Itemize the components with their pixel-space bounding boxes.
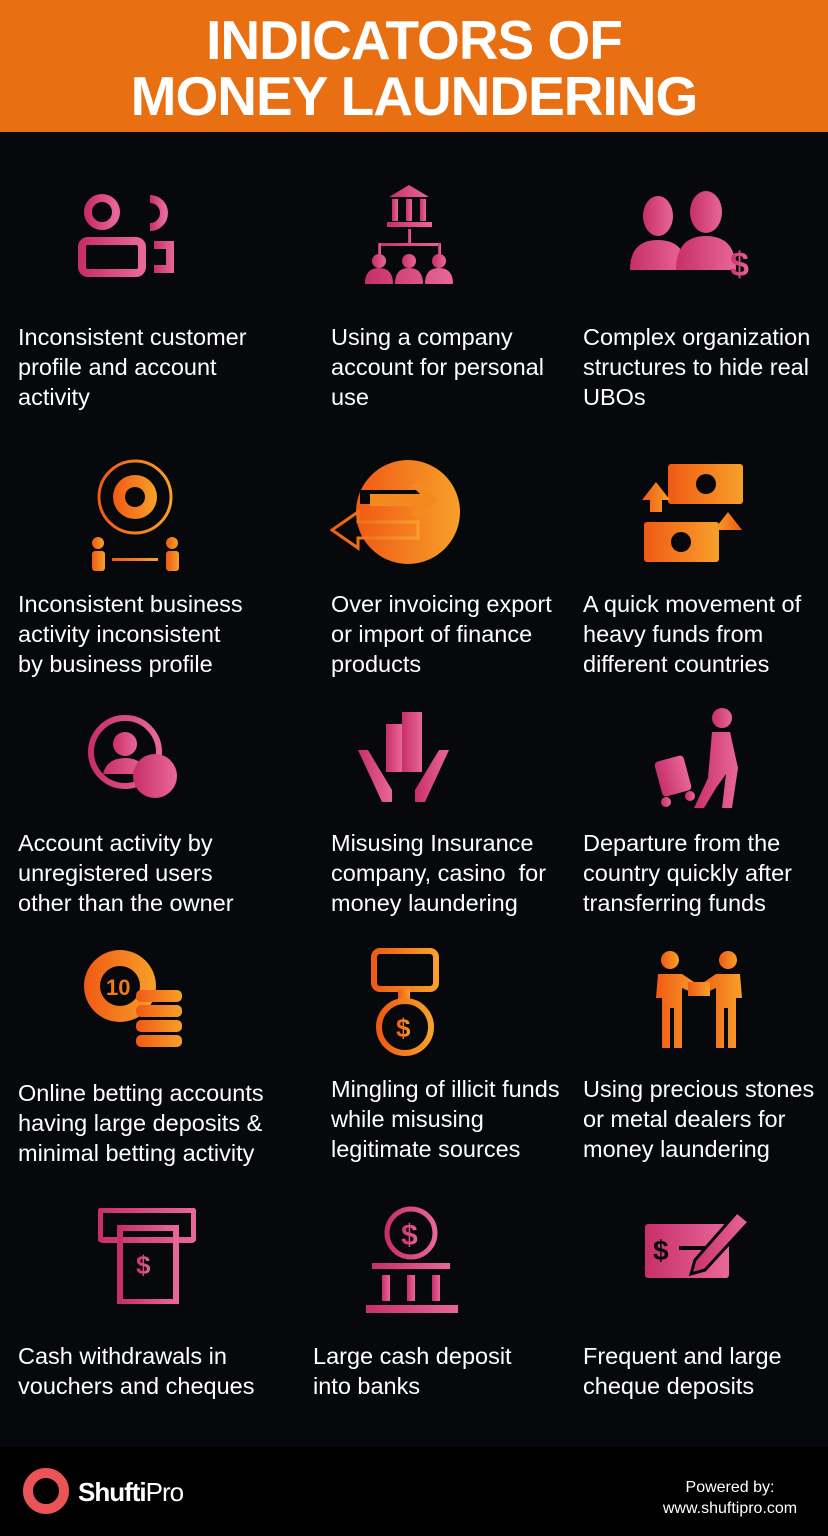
text: Over invoicing export <box>331 591 552 617</box>
icon: hands building <box>358 712 449 802</box>
text: Inconsistent customer <box>18 324 247 350</box>
text: by business profile <box>18 651 213 677</box>
icon: businessmen dollar: $ <box>730 246 749 283</box>
text: Inconsistent business <box>18 591 243 617</box>
text: structures to hide real <box>583 354 809 380</box>
powered by <box>662 1479 797 1517</box>
text: Frequent and large <box>583 1343 782 1369</box>
icon: hand money bag <box>371 948 439 1056</box>
icon: users <box>78 194 174 277</box>
logo <box>23 1468 183 1514</box>
text: profile and account <box>18 354 217 380</box>
text: country quickly after <box>583 860 792 886</box>
text: cheque deposits <box>583 1373 754 1399</box>
icon: businessmen dollar <box>630 191 749 283</box>
icon: cheque pen: $ <box>653 1235 669 1266</box>
text: other than the owner <box>18 890 234 916</box>
text: transferring funds <box>583 890 766 916</box>
icon: globe arrow <box>330 460 460 564</box>
text: Large cash deposit <box>313 1343 512 1369</box>
text: unregistered users <box>18 860 213 886</box>
text: having large deposits & <box>18 1110 262 1136</box>
text: Account activity by <box>18 830 213 856</box>
icon: cheque pen <box>645 1214 747 1278</box>
icon: bank coin <box>366 1206 458 1313</box>
text: Complex organization <box>583 324 810 350</box>
icon: hand money bag: $ <box>396 1013 411 1043</box>
text: UBOs <box>583 384 646 410</box>
text: activity <box>18 384 90 410</box>
text: Using a company <box>331 324 513 350</box>
text: different countries <box>583 651 769 677</box>
text: use <box>331 384 369 410</box>
text: money laundering <box>331 890 518 916</box>
text: or import of finance <box>331 621 532 647</box>
icon: user circle <box>88 715 177 798</box>
text: Mingling of illicit funds <box>331 1076 560 1102</box>
text: money laundering <box>583 1136 770 1162</box>
icon: bank hierarchy <box>365 185 453 284</box>
powered by: Powered by: <box>686 1479 774 1496</box>
text: Misusing Insurance <box>331 830 533 856</box>
icon: cash withdrawal <box>98 1208 196 1304</box>
text: Departure from the <box>583 830 780 856</box>
text: into banks <box>313 1373 420 1399</box>
icon: handshake people <box>656 951 742 1048</box>
icon: gear people <box>92 460 179 571</box>
powered by: www.shuftipro.com <box>663 1500 797 1517</box>
logo: ShuftiPro <box>78 1477 183 1507</box>
text: company, casino for <box>331 860 546 886</box>
text: Using precious stones <box>583 1076 814 1102</box>
text: account for personal <box>331 354 544 380</box>
icon: bank coin: $ <box>401 1219 418 1252</box>
text: heavy funds from <box>583 621 763 647</box>
text: Cash withdrawals in <box>18 1343 227 1369</box>
text: or metal dealers for <box>583 1106 785 1132</box>
icon: chips coins <box>84 950 182 1047</box>
icon: chips coins: 10 <box>106 975 130 1000</box>
text: products <box>331 651 421 677</box>
icon: cash withdrawal: $ <box>136 1250 151 1280</box>
title <box>0 0 828 132</box>
icon: traveller <box>654 708 738 808</box>
text: activity inconsistent <box>18 621 220 647</box>
title: INDICATORS OF <box>206 9 622 71</box>
text: vouchers and cheques <box>18 1373 254 1399</box>
text: Online betting accounts <box>18 1080 264 1106</box>
text: A quick movement of <box>583 591 801 617</box>
text: while misusing <box>331 1106 484 1132</box>
text: minimal betting activity <box>18 1140 254 1166</box>
title: MONEY LAUNDERING <box>131 65 697 127</box>
footer <box>0 1447 828 1536</box>
text: legitimate sources <box>331 1136 520 1162</box>
icon: money exchange <box>642 464 743 562</box>
